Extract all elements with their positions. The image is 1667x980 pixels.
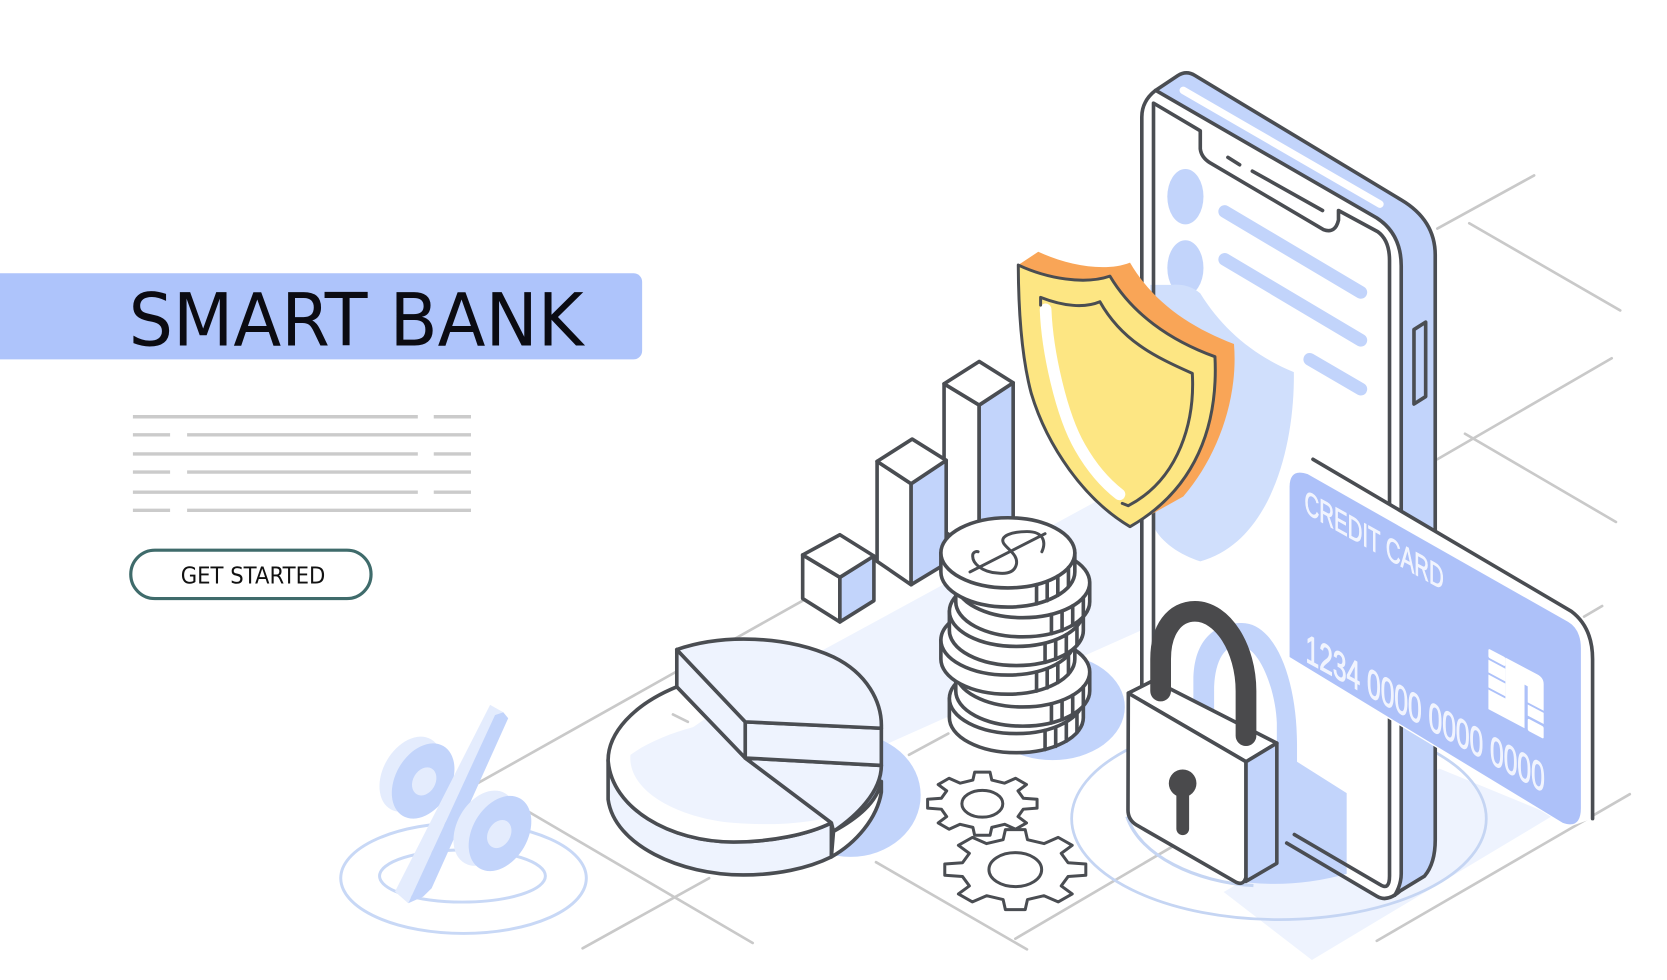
- shield highlight: [1046, 309, 1119, 494]
- floor highlight bands: [787, 473, 1553, 960]
- shield inner outline: [1041, 297, 1193, 506]
- shield back: [1018, 252, 1235, 526]
- coin 3: [949, 576, 1083, 666]
- lock base shadow arc: [1127, 816, 1253, 886]
- bar chart: [803, 361, 1013, 622]
- coin stack shadow: [980, 654, 1125, 760]
- card chip: [1488, 649, 1544, 739]
- grid tick on disk: [673, 714, 688, 722]
- percent slash: [395, 705, 508, 903]
- pie front edge: [677, 687, 831, 823]
- raised slice left side: [677, 650, 745, 758]
- pie chart shadow: [780, 734, 921, 857]
- lower disk side: [608, 760, 831, 875]
- percent upper circle: [367, 725, 467, 830]
- padlock: [1127, 611, 1277, 886]
- percent lower circle: [441, 779, 544, 882]
- lock front face: [1128, 693, 1246, 883]
- avatars on screen: [1167, 169, 1203, 296]
- card title: CREDIT CARD: [1304, 483, 1444, 598]
- keyhole: [1169, 769, 1196, 835]
- placeholder paragraph lines: [133, 417, 471, 510]
- card front: [1290, 473, 1581, 824]
- lock side face: [1246, 743, 1277, 881]
- button label: GET STARTED: [181, 564, 325, 590]
- phone side face: [1156, 73, 1435, 893]
- lower disk top: [608, 687, 831, 842]
- shield front: [1018, 265, 1215, 527]
- percent rings: [341, 823, 586, 933]
- tall bar: [944, 361, 1013, 553]
- lower disk top tint: [630, 718, 824, 824]
- small bar: [803, 535, 874, 622]
- raised slice right side: [745, 722, 881, 765]
- title text: SMART BANK: [129, 279, 585, 364]
- banner background: [0, 273, 642, 359]
- content lines on screen: [1225, 212, 1361, 389]
- title banner: [0, 273, 642, 364]
- smartphone: [1142, 73, 1435, 898]
- coin stack: [941, 518, 1090, 753]
- dollar sign: [970, 532, 1045, 573]
- pie chart: [608, 639, 881, 875]
- phone top highlight: [1183, 90, 1380, 204]
- credit card: [1290, 459, 1593, 827]
- gears: [928, 772, 1086, 910]
- lock shackle: [1161, 611, 1246, 736]
- button outline: [131, 550, 371, 599]
- large ring around phone: [1072, 718, 1486, 920]
- floor grid lines: [475, 175, 1630, 949]
- coin 4: [941, 605, 1075, 694]
- shield shadow on phone: [1150, 285, 1294, 561]
- card white back: [1290, 459, 1593, 827]
- card back edge: [1313, 459, 1593, 819]
- raised slice top: [677, 639, 881, 728]
- phone outlines: [1142, 73, 1435, 898]
- right wedge top: [745, 758, 881, 831]
- percent symbol with rings: [341, 705, 586, 933]
- lock shadow on phone: [1193, 623, 1347, 884]
- large gear: [945, 830, 1086, 910]
- small gear: [928, 772, 1037, 835]
- coin 6: [949, 663, 1083, 753]
- phone screen fill: [1142, 90, 1401, 898]
- coin 5: [956, 637, 1090, 726]
- shield: [1018, 252, 1235, 527]
- lock top face: [1128, 680, 1277, 762]
- get started button: [131, 550, 371, 599]
- coin 1 with dollar sign: [941, 518, 1075, 607]
- coin 2: [956, 548, 1090, 637]
- middle bar: [877, 439, 946, 585]
- right wedge side: [831, 781, 881, 857]
